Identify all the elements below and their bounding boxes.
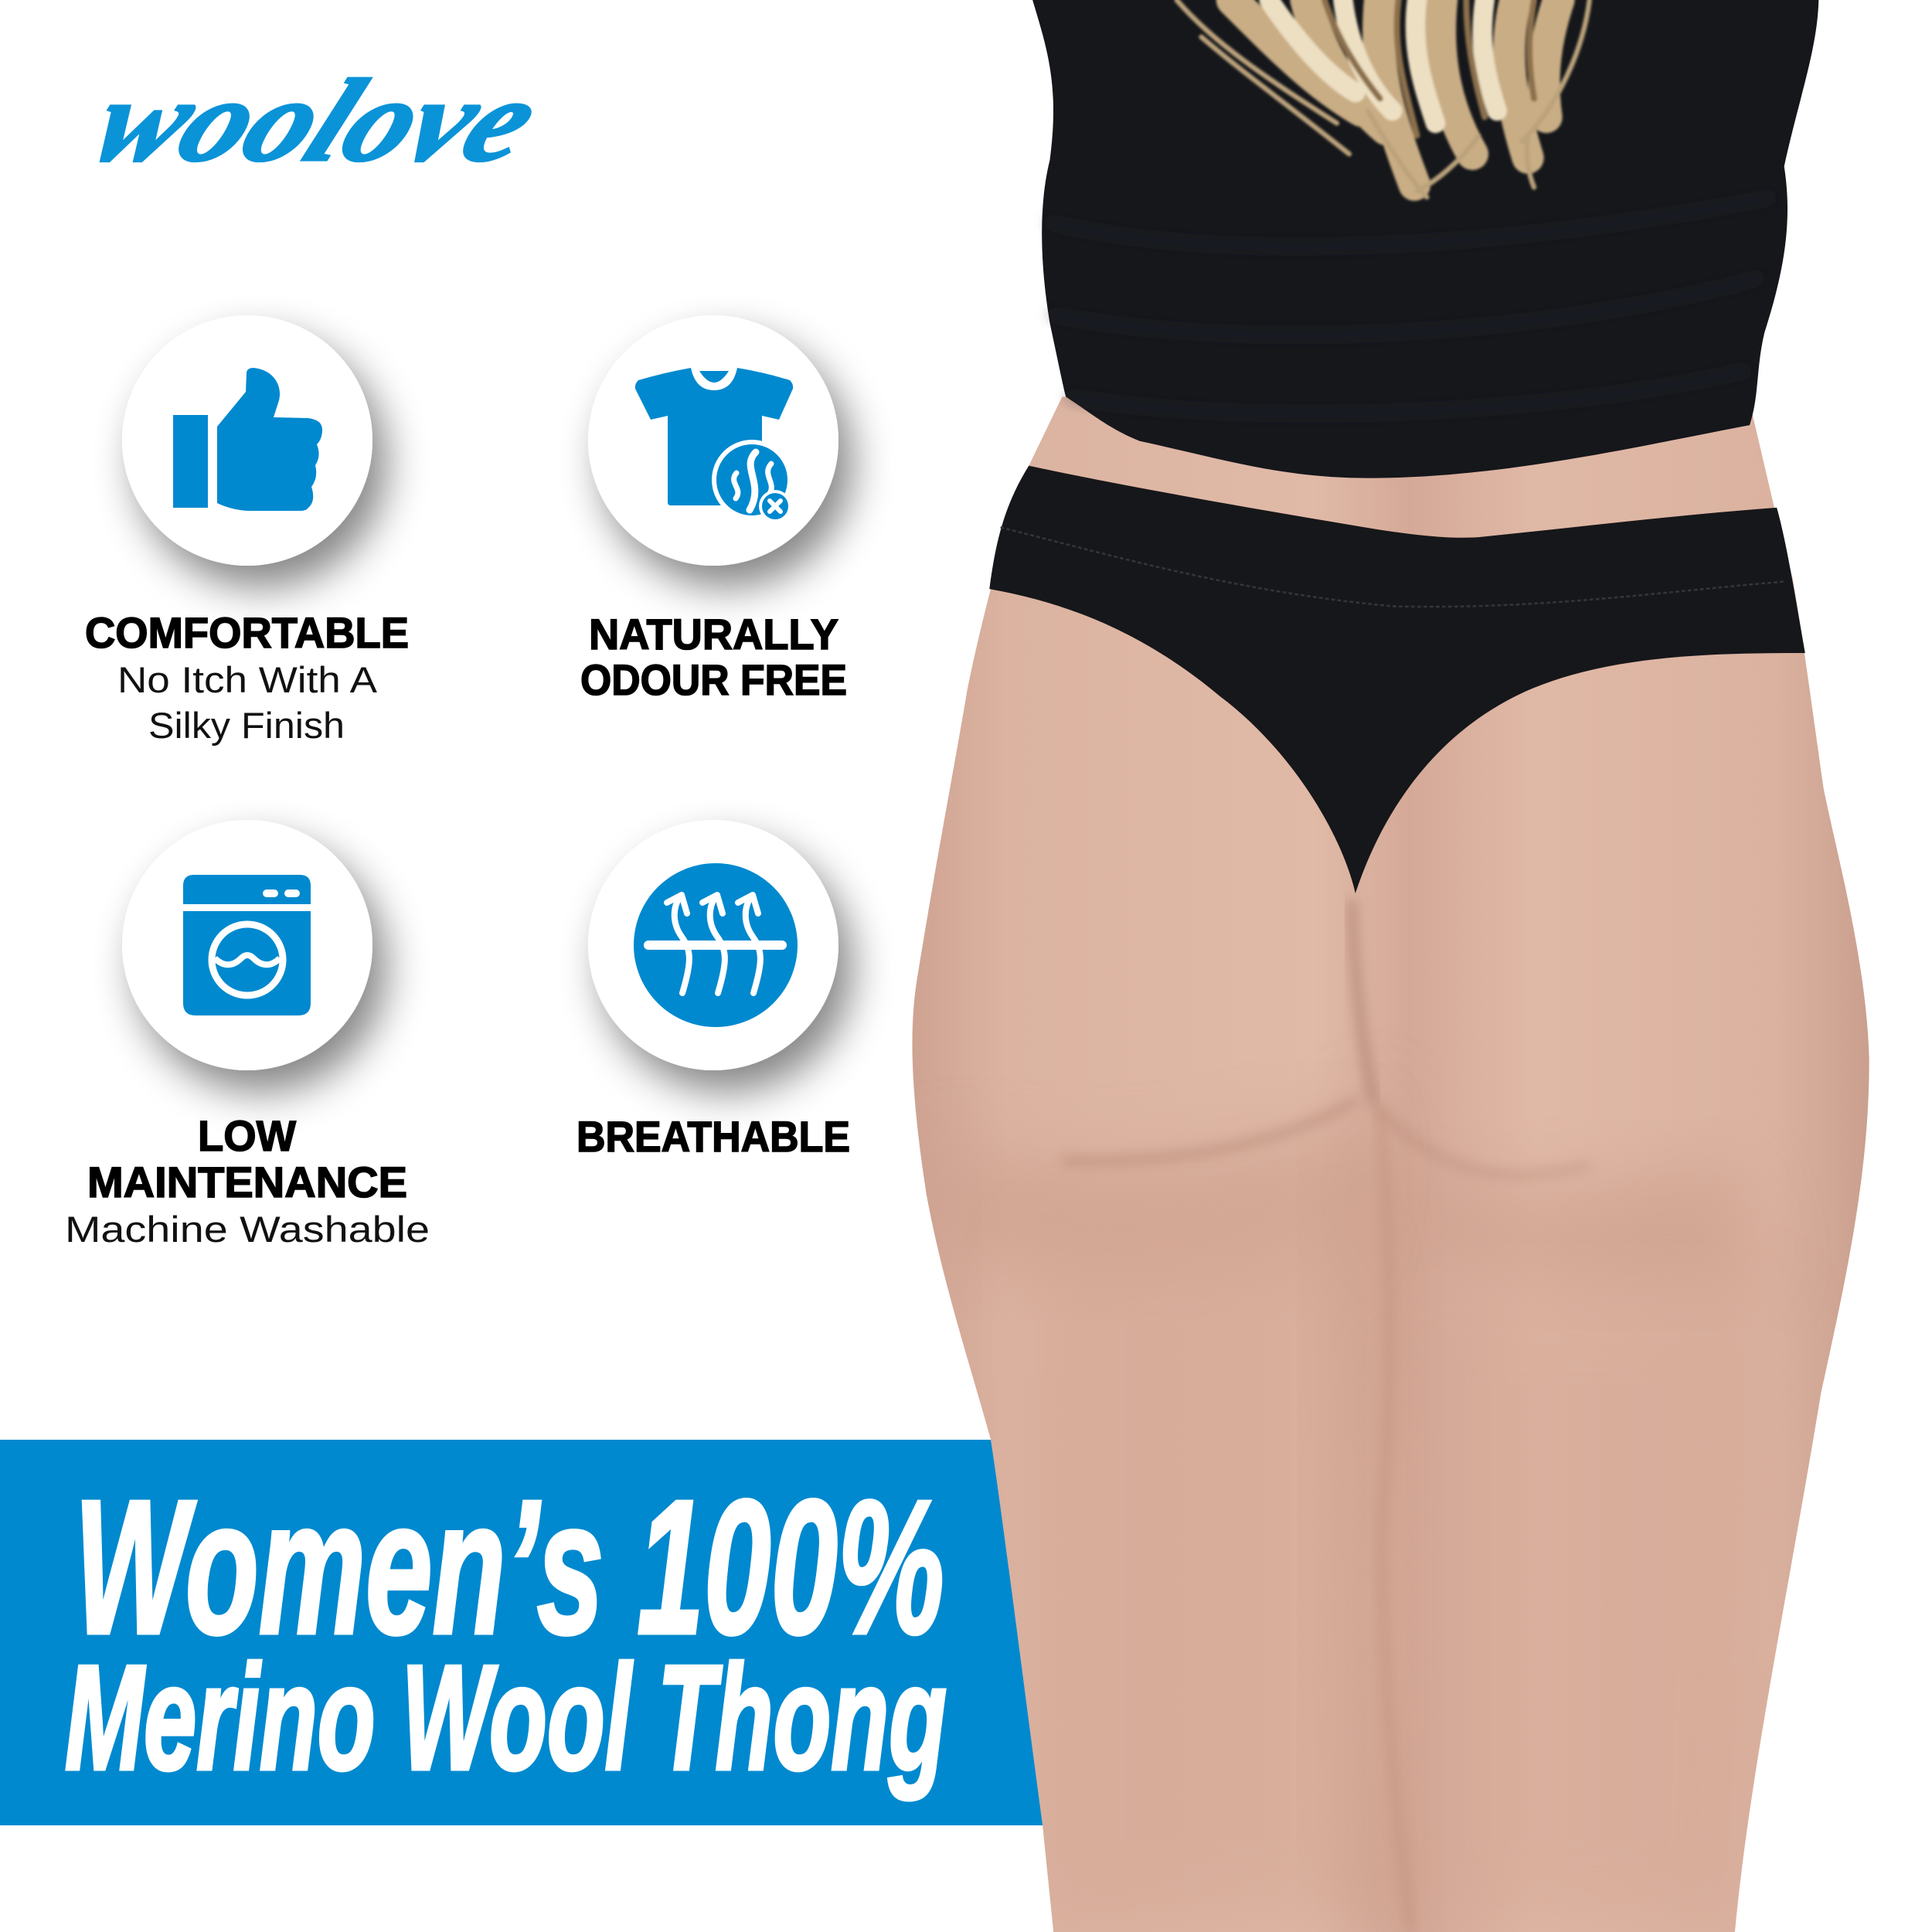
product photo: model wearing top and underwear <box>912 0 1869 1932</box>
icon: breathable fabric arrows <box>588 820 838 1070</box>
figure: black top <box>1032 0 1818 478</box>
heading: comfortable: COMFORTABLE <box>85 608 409 657</box>
logo: woolove: woolove <box>74 55 560 185</box>
title line 1: Women’s 100% <box>74 1461 944 1674</box>
panel: breathable <box>577 820 850 1161</box>
banner: product title <box>0 1440 1045 1825</box>
figure: black underwear <box>989 466 1805 893</box>
figure: body <box>912 396 1869 1932</box>
panel: naturally odour free <box>580 315 847 704</box>
panel: low maintenance <box>65 820 430 1250</box>
text: no itch: No Itch With A <box>117 659 378 700</box>
text: silky finish: Silky Finish <box>148 705 345 746</box>
panel: comfortable <box>85 315 409 746</box>
icon: thumbs up <box>122 315 372 566</box>
text: machine washable: Machine Washable <box>65 1209 430 1250</box>
icon: washing machine <box>122 820 372 1070</box>
heading: low: LOW <box>198 1111 296 1160</box>
heading: breathable: BREATHABLE <box>577 1112 850 1161</box>
title line 2: Merino Wool Thong <box>65 1634 947 1801</box>
figure: blonde hair <box>1177 0 1590 197</box>
heading: odour free: ODOUR FREE <box>580 655 847 704</box>
heading: maintenance: MAINTENANCE <box>87 1158 407 1206</box>
heading: naturally: NATURALLY <box>589 610 838 658</box>
icon: t-shirt with odour badge <box>588 315 838 566</box>
